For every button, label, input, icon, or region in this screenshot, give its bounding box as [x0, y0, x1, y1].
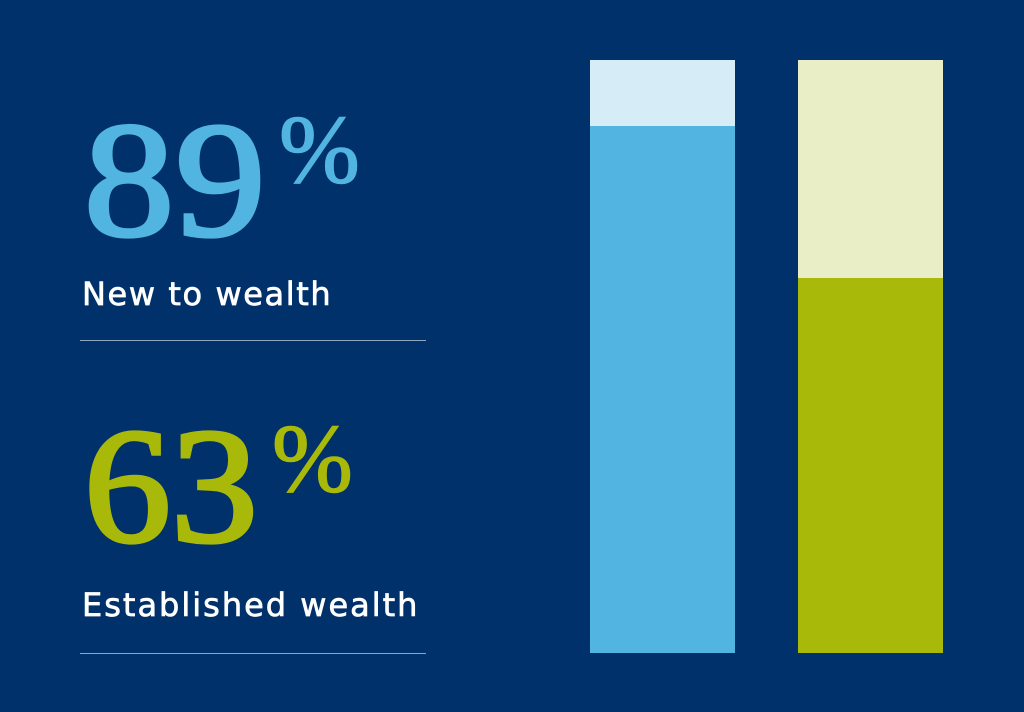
bar fill	[798, 278, 943, 653]
number: 63: 63	[84, 396, 258, 577]
bar: new to wealth 89%	[590, 60, 735, 653]
label: new to wealth: New to wealth	[82, 275, 332, 313]
stat: new to wealth	[80, 90, 426, 341]
percent sign: %	[272, 405, 353, 512]
percent sign: %	[279, 96, 360, 203]
label: established wealth: Established wealth	[82, 586, 419, 624]
divider	[80, 653, 426, 654]
number: 89: 89	[84, 90, 267, 271]
bar fill	[590, 126, 735, 653]
bar: established wealth 63%	[798, 60, 943, 653]
divider	[80, 340, 426, 341]
stat: established wealth	[80, 396, 426, 654]
